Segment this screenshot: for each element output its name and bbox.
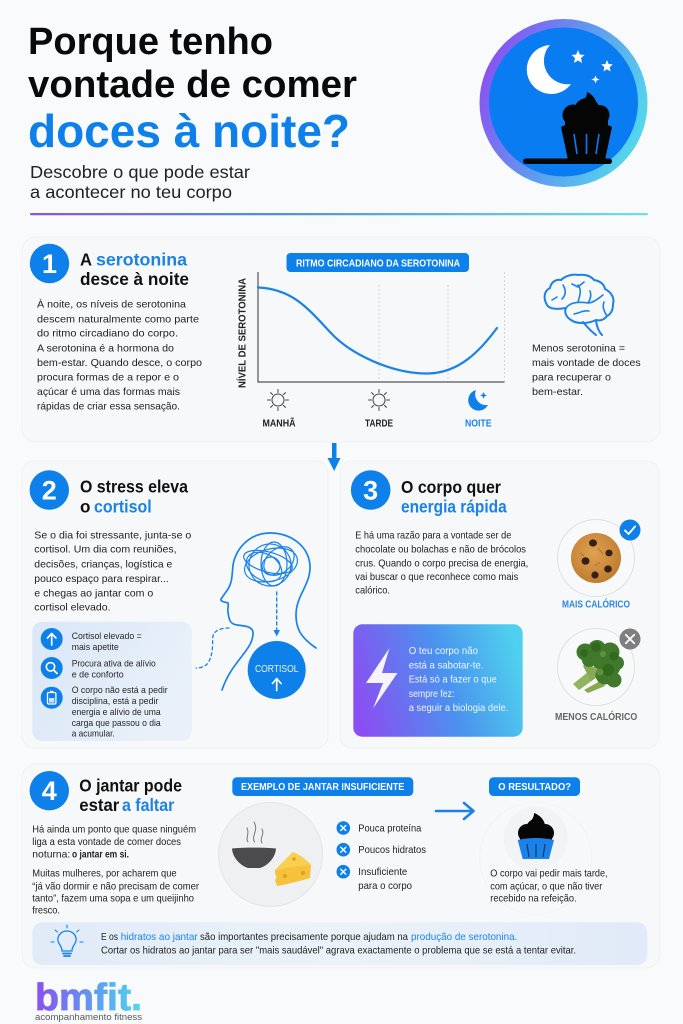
text block 2: e chegas ao jantar com o: [34, 587, 153, 599]
heading 1: A: [80, 250, 92, 270]
text block 3: calórico.: [355, 584, 390, 596]
subtitle: Descobre o que pode estar: [30, 162, 250, 182]
text: menos serotonina: bem-estar.: [532, 386, 583, 398]
heading 4: estar: [79, 795, 119, 815]
icon: lightning bolt: [366, 648, 398, 708]
heading 4: O jantar pode: [79, 776, 182, 796]
pill: exemplo de jantar: EXEMPLO DE JANTAR INSUFICIENTE: [241, 781, 404, 793]
text block 2: cortisol elevado.: [34, 602, 111, 614]
panel: 3 energia rápida: [340, 461, 659, 748]
callout: hidratos: hidratos ao jantar: [121, 931, 198, 943]
text: resultado: com açúcar, o que não tiver: [490, 880, 603, 892]
callout: gradient message with bolt: sempre fez:: [409, 688, 454, 700]
callout: gradient message with bolt: O teu corpo não: [409, 645, 478, 657]
icon: broccoli: [558, 628, 634, 706]
line chart: serotonin circadian rhythm: [236, 272, 504, 388]
number badge 4: 4: [42, 776, 57, 806]
icon: moon, stars and cupcake badge: [480, 19, 648, 187]
divider gradient rule: [30, 213, 648, 215]
number badge 3: 3: [363, 476, 378, 506]
number badge 4: [30, 771, 69, 810]
text block 2: Se o dia foi stressante, junta-se o: [34, 529, 191, 541]
text block 2: [34, 529, 191, 614]
callout: gradient message with bolt: Está só a fazer o que: [409, 674, 497, 686]
check badge: [620, 520, 640, 540]
text block 1: do ritmo circadiano do corpo.: [37, 328, 178, 340]
callout: hidratos: são importantes precisamente porque ajudam na: [200, 931, 408, 943]
text block 1: À noite, os níveis de serotonina: [37, 298, 186, 311]
text block 4: o jantar em si.: [72, 848, 129, 860]
panel: 4 jantar: [22, 764, 660, 968]
callout: hidratos: E os: [101, 931, 118, 943]
text: resultado: [490, 868, 608, 905]
heading 1: [80, 250, 189, 289]
close badge: [620, 628, 640, 650]
icon: magnifier: [41, 657, 63, 679]
pill: exemplo de jantar: [232, 777, 413, 796]
callout: hidratos: [32, 922, 647, 965]
label: menos calórico: MENOS CALÓRICO: [555, 710, 637, 723]
title: Porque tenho: [28, 21, 273, 63]
text block 2: cortisol. Um dia com reuniões,: [34, 544, 177, 556]
text block 1: [37, 298, 202, 412]
item: insuficiente para o corpo: [336, 865, 412, 892]
text block 4: “já vão dormir e não precisam de comer: [32, 880, 199, 892]
text: menos serotonina: para recuperar o: [532, 372, 611, 384]
callout: gradient message with bolt: [353, 624, 523, 737]
text: menos serotonina: mais vontade de doces: [532, 357, 641, 369]
heading 2: o: [80, 497, 90, 517]
text: cortisol elevado: [72, 631, 142, 652]
text block 3: vai buscar o que reconhece como mais: [355, 571, 518, 583]
title: doces à noite?: [28, 105, 350, 157]
heading 1: serotonina: [96, 250, 187, 270]
icon: brain: [545, 275, 614, 335]
icon: sun afternoon: [368, 390, 390, 410]
panel: 2 stress cortisol: [22, 461, 328, 748]
item: poucos hidratos: Poucos hidratos: [358, 844, 426, 856]
callout: hidratos: Cortar os hidratos ao jantar para ser "mais saudável" agrava exactamente o problema que se está a tentar evitar.: [101, 944, 576, 956]
text block 1: descem naturalmente como parte: [37, 313, 199, 325]
heading 3: energia rápida: [401, 497, 507, 517]
panel: 1 serotonina: [22, 237, 660, 442]
callout: gradient message with bolt: está a sabotar-te.: [409, 659, 483, 671]
number badge 3: [351, 470, 391, 510]
label: manhã: MANHÃ: [262, 417, 296, 430]
text: corpo não pede disciplina: O corpo não está a pedir: [72, 685, 168, 695]
text block 4: fresco.: [32, 904, 60, 916]
label: tarde: TARDE: [365, 418, 393, 430]
logo: bmfit.: [35, 977, 142, 1019]
text: procura alívio: Procura ativa de alívio: [72, 659, 156, 669]
line chart: serotonin circadian rhythm: NÍVEL DE SEROTONINA: [236, 278, 248, 388]
text block 4: [32, 824, 199, 916]
callout panel: cortisol effects: [32, 622, 192, 741]
callout: gradient message with bolt: a seguir a biologia dele.: [409, 702, 508, 714]
heading 4: [79, 776, 182, 815]
text: corpo não pede disciplina: disciplina, está a pedir: [72, 696, 158, 706]
icon: arrow up: [41, 628, 63, 650]
text: menos serotonina: Menos serotonina =: [532, 342, 625, 354]
heading 2: O stress eleva: [80, 477, 188, 497]
text block 1: bem-estar. Quando desce, o corpo: [37, 357, 202, 369]
text block 4: noturna:: [32, 848, 70, 860]
text: cortisol elevado: mais apetite: [72, 642, 119, 652]
text block 2: pouco espaço para respirar...: [34, 573, 169, 585]
text block 4: liga a esta vontade de comer doces: [32, 836, 181, 848]
cortisol circle: CORTISOL: [255, 663, 299, 675]
arrow: down between panels: [328, 443, 340, 471]
subtitle: [30, 162, 250, 202]
list: insufficient dinner: [336, 821, 426, 892]
text: corpo não pede disciplina: a acumular.: [72, 729, 115, 739]
callout: hidratos: produção de serotonina.: [411, 931, 517, 943]
pill: o resultado: O RESULTADO?: [498, 781, 571, 793]
heading 1: desce à noite: [80, 269, 189, 289]
arrow: to result: [436, 803, 474, 819]
cortisol circle: [248, 641, 306, 699]
item: pouca proteína: Pouca proteína: [358, 823, 421, 835]
heading 2: cortisol: [94, 497, 152, 517]
title: [28, 21, 357, 157]
text: resultado: recebido na refeição.: [490, 893, 577, 905]
heading 4: a faltar: [122, 795, 174, 815]
text block 4: tanto”, fazem uma sopa e um queijinho: [32, 893, 194, 905]
number badge 1: [30, 244, 69, 283]
text: corpo não pede disciplina: energia e alívio de uma: [72, 707, 161, 717]
text: corpo não pede disciplina: [72, 685, 168, 739]
text block 3: chocolate ou bolachas e não de brócolos: [355, 543, 526, 555]
heading 2: [80, 477, 188, 517]
heading 3: O corpo quer: [401, 477, 501, 497]
text block 1: procura formas de a repor e o: [37, 371, 179, 383]
text block 3: E há uma razão para a vontade ser de: [355, 529, 511, 541]
text: cortisol elevado: Cortisol elevado =: [72, 631, 142, 641]
text block 1: açúcar é uma das formas mais: [37, 386, 180, 398]
icon: sun morning: [268, 390, 288, 410]
label: mais calórico: MAIS CALÓRICO: [562, 598, 630, 611]
icon: cookie: [558, 520, 634, 596]
number badge 2: [30, 470, 69, 510]
text block 3: crus. Quando o corpo precisa de energia,: [355, 557, 528, 569]
text: resultado: O corpo vai pedir mais tarde,: [490, 868, 608, 880]
text block 2: decisões, crianças, logística e: [34, 559, 172, 571]
illustration: head with tangled thoughts: [196, 533, 316, 690]
number badge 1: 1: [42, 249, 57, 279]
icon: cupcake result: [480, 802, 592, 914]
icon: moon night: [468, 390, 488, 411]
heading 3: [401, 477, 507, 517]
chart title pill: RITMO CIRCADIANO DA SEROTONINA: [296, 258, 460, 270]
item: insuficiente para o corpo: Insuficiente: [358, 866, 407, 878]
text: corpo não pede disciplina: carga que passou o dia: [72, 718, 161, 728]
label: noite: NOITE: [465, 418, 492, 430]
text: procura alívio: [72, 659, 156, 680]
pill: o resultado: [489, 777, 580, 796]
item: insuficiente para o corpo: para o corpo: [358, 880, 412, 892]
illustration: soup and cheese: [218, 802, 322, 906]
chart title pill: [286, 253, 469, 272]
number badge 2: 2: [42, 476, 57, 506]
text: procura alívio: e de conforto: [72, 670, 124, 680]
icon: light bulb: [51, 925, 83, 956]
text block 1: A serotonina é a hormona do: [37, 342, 174, 354]
subtitle: a acontecer no teu corpo: [30, 182, 232, 202]
text block 3: [355, 529, 528, 596]
logo: acompanhamento fitness: [35, 1012, 142, 1023]
text block 4: Muitas mulheres, por acharem que: [32, 868, 177, 880]
text: menos serotonina: [532, 342, 641, 398]
title: vontade de comer: [28, 64, 357, 106]
text block 1: rápidas de criar essa sensação.: [37, 400, 180, 412]
text block 4: Há ainda um ponto que quase ninguém: [32, 824, 196, 836]
icon: battery: [41, 687, 63, 709]
